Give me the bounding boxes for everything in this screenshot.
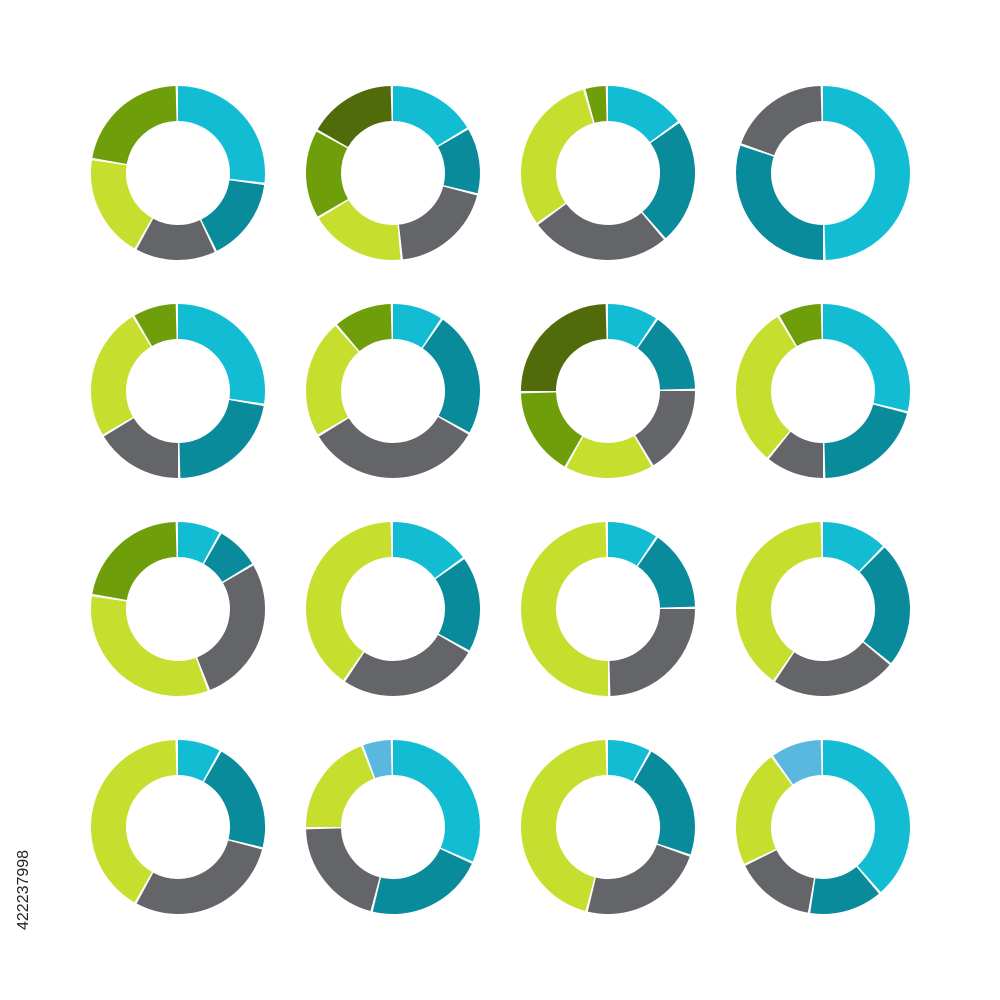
donut 7: [511, 294, 705, 488]
donut 2: [298, 78, 488, 268]
donut 10: [296, 512, 490, 706]
donut 12: [725, 511, 921, 707]
donut 14: [301, 735, 485, 919]
donut 8: [725, 293, 921, 489]
donut 16: [725, 729, 921, 925]
donut 4: [734, 84, 912, 262]
donut 6: [295, 293, 491, 489]
donut 3: [510, 75, 706, 271]
donut 15: [513, 732, 703, 922]
donut 5: [83, 296, 273, 486]
donut 13: [83, 732, 273, 922]
donut 11: [511, 512, 705, 706]
stock id text: 422237998: [15, 850, 32, 930]
donut 1: [83, 78, 273, 268]
donut 9: [83, 514, 273, 704]
